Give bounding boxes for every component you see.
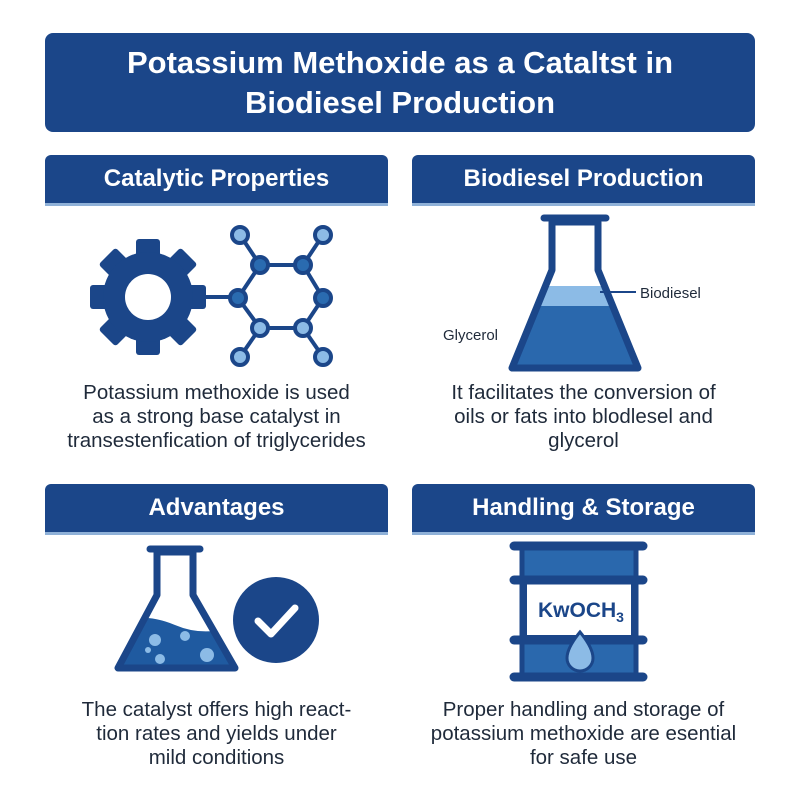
icon: flask with layers (443, 218, 701, 376)
text: advantages: tion rates and yields under (96, 722, 337, 745)
heading: catalytic properties: Catalytic Properties (104, 165, 329, 192)
heading: catalytic properties (45, 155, 388, 206)
text: production: oils or fats into blodlesel and (454, 405, 713, 428)
text: handling (431, 698, 736, 769)
title: Potassium Methoxide as a Cataltst in (127, 45, 673, 80)
text: production: glycerol (548, 429, 619, 452)
heading: biodiesel production (412, 155, 755, 206)
text: handling: potassium methoxide are esential (431, 722, 736, 745)
text: advantages: mild conditions (149, 746, 284, 769)
text: advantages: The catalyst offers high react- (82, 698, 351, 721)
title: Biodiesel Production (245, 85, 555, 120)
text: catalytic: Potassium methoxide is used (83, 381, 350, 404)
heading: handling: Handling & Storage (472, 494, 695, 521)
text: production: It facilitates the conversion of (451, 381, 716, 404)
title (45, 33, 755, 132)
text: handling: for safe use (530, 746, 637, 769)
heading: handling (412, 484, 755, 535)
text: catalytic: transestenfication of triglycerides (67, 429, 366, 452)
icon: barrel: 3 (616, 609, 624, 625)
heading: advantages (45, 484, 388, 535)
icon: flask with layers: Glycerol (443, 327, 498, 344)
icon: gear and molecule (90, 227, 331, 365)
text: handling: Proper handling and storage of (443, 698, 724, 721)
icon: barrel: KwOCH (538, 599, 616, 622)
icons (90, 214, 700, 682)
text: catalytic: as a strong base catalyst in (92, 405, 341, 428)
icon: barrel (514, 546, 643, 678)
heading: biodiesel production: Biodiesel Production (463, 165, 704, 192)
text: advantages (82, 698, 351, 769)
heading: advantages: Advantages (148, 494, 285, 521)
text: catalytic (67, 381, 366, 452)
icon: flask with bubbles (114, 546, 319, 672)
icon: flask with layers: Biodiesel (640, 285, 701, 302)
text: production (451, 381, 716, 452)
